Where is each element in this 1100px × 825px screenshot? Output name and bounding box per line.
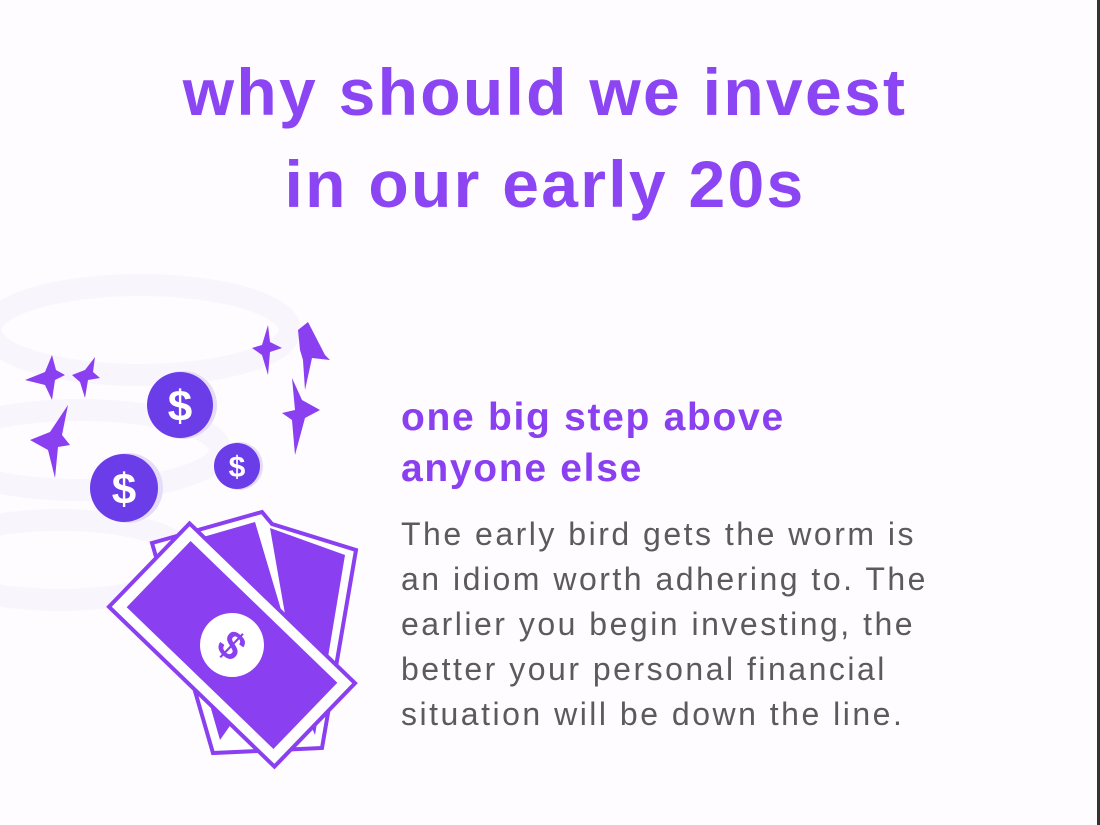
bills: $ [208, 622, 255, 669]
subheading: anyone else [401, 447, 643, 490]
body text: earlier you begin investing, the [401, 606, 915, 642]
subheading: one big step above [401, 396, 785, 439]
coins: $ [168, 382, 192, 431]
coins [90, 371, 263, 523]
right border line [1097, 0, 1100, 825]
birds [25, 322, 330, 478]
bills [109, 512, 356, 767]
coins: $ [112, 465, 136, 514]
title: why should we invest [183, 55, 907, 129]
body text: better your personal financial [401, 651, 887, 687]
title [182, 55, 907, 221]
coins: $ [229, 451, 246, 484]
body text: The early bird gets the worm is [401, 516, 916, 552]
body text: an idiom worth adhering to. The [401, 561, 928, 597]
body text: situation will be down the line. [401, 696, 904, 732]
background swirl [0, 285, 290, 600]
illustration [25, 322, 358, 770]
title: in our early 20s [284, 147, 806, 221]
subheading [401, 396, 785, 490]
body text [401, 516, 928, 732]
